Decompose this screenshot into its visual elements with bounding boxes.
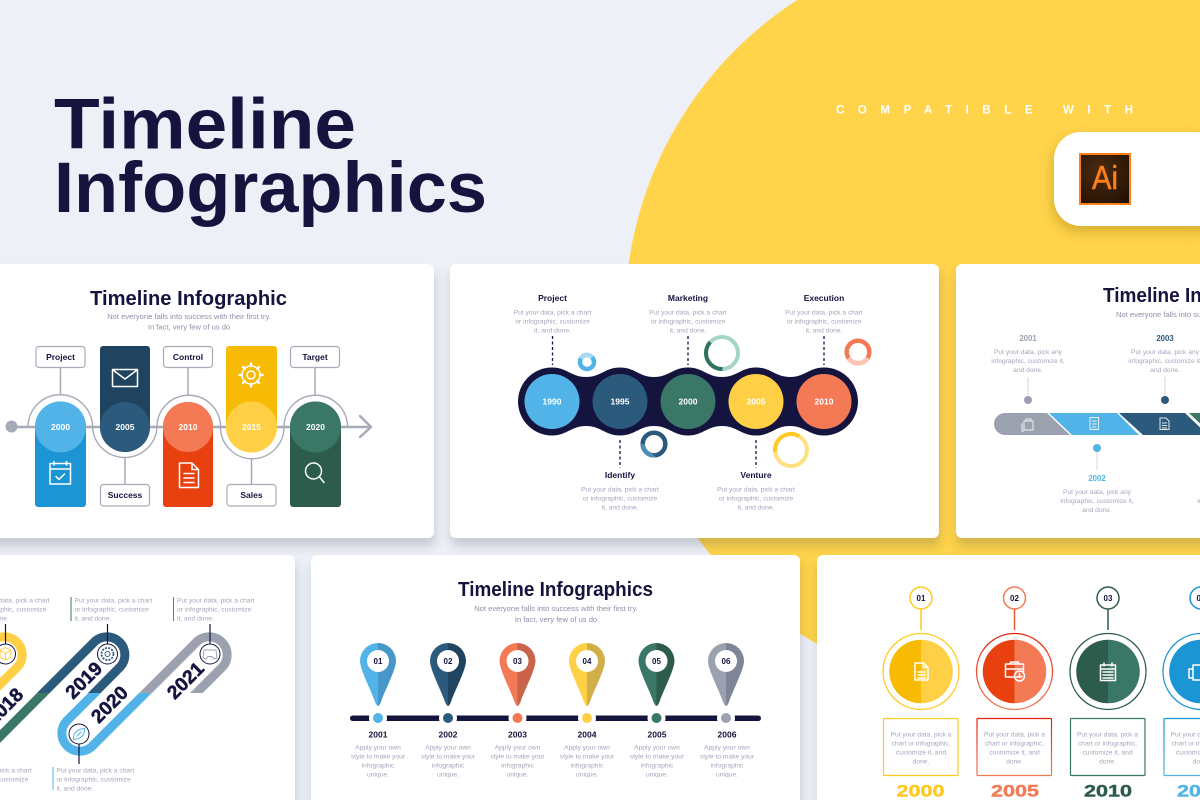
icon: briefcase clock xyxy=(1006,662,1024,681)
pin 05: 2005 xyxy=(648,730,667,740)
milestone descriptions: Put your data, pick a chart xyxy=(785,310,863,316)
pin 06: Apply your own xyxy=(704,744,750,752)
column 2005: done. xyxy=(1006,758,1023,766)
pin 01: Apply your own xyxy=(355,744,401,752)
main title: Timeline xyxy=(54,86,356,164)
segmented bar xyxy=(994,413,1200,435)
milestone descriptions: or infographic, customize xyxy=(787,318,861,326)
milestone 2003 xyxy=(1128,334,1200,404)
panel title: Timeline Infographics xyxy=(458,578,653,601)
milestone descriptions: Put your data, pick a chart xyxy=(717,486,795,494)
navy bubble chain xyxy=(518,368,858,436)
column 2005: chart or infographic, xyxy=(985,740,1044,748)
panel: timeline with pills xyxy=(0,264,434,538)
milestone descriptions: Put your data, pick a chart xyxy=(514,310,591,316)
rotated years: 2021 xyxy=(163,658,209,704)
milestone descriptions: it, and done. xyxy=(738,504,775,512)
accent bars xyxy=(70,597,72,621)
milestone labels: Project xyxy=(538,293,567,303)
pin 03: infographic xyxy=(501,762,535,770)
panel: arrow bar timeline xyxy=(956,264,1200,538)
milestone labels: Marketing xyxy=(668,293,708,303)
milestone 2002: infographic, customize it, xyxy=(1060,498,1134,505)
pin 01: style to make your xyxy=(351,754,406,760)
column 2000 xyxy=(883,587,959,800)
capsule bands upper xyxy=(0,637,227,704)
panel subtitle: Not everyone falls into success with their first try. xyxy=(107,312,271,321)
milestone descriptions: it, and done. xyxy=(806,328,843,334)
milestone 2002 xyxy=(1060,444,1134,514)
pill: 2000 xyxy=(35,402,86,507)
milestone 2002: 2002 xyxy=(1088,474,1106,483)
main title: Infographics xyxy=(54,149,487,228)
year bubbles xyxy=(524,374,852,429)
panel subtitle: In fact, very few of us do xyxy=(148,322,230,332)
pin 06: infographic xyxy=(711,762,744,770)
rotated years: 2020 xyxy=(87,682,133,728)
column 2010: Put your data, pick a xyxy=(1077,732,1138,738)
icon: calendar xyxy=(1100,663,1116,680)
icon: gamepad node xyxy=(200,644,220,664)
rotated years: 2019 xyxy=(62,658,107,704)
pin 03: Apply your own xyxy=(495,744,541,752)
column 2000: done. xyxy=(913,758,930,766)
descriptions: or infographic, customize xyxy=(74,606,149,614)
pin 05: style to make your xyxy=(630,754,685,760)
milestone 2002: and done. xyxy=(1082,507,1112,514)
descriptions: or infographic, customize xyxy=(56,776,131,784)
column 2005: 02 xyxy=(1010,594,1019,603)
descriptions: or infographic, customize xyxy=(177,606,252,614)
milestone labels: Identify xyxy=(605,470,635,480)
pin 05 xyxy=(630,643,685,778)
main title xyxy=(54,86,487,228)
panel: diagonal capsule timeline xyxy=(0,555,295,800)
descriptions: it, and done. xyxy=(177,616,214,622)
pin 02: infographic xyxy=(432,762,465,770)
year bubbles: 2000 xyxy=(679,396,698,406)
pill: 2020 xyxy=(290,402,341,507)
icon: Ai logo: Ai xyxy=(1092,159,1118,196)
milestone 2002: Put your data, pick any xyxy=(1063,489,1132,496)
milestone descriptions: or infographic, customize xyxy=(515,318,590,326)
serpentine timeline line xyxy=(6,368,371,484)
pin 02: unique. xyxy=(437,772,459,778)
pin 03: unique. xyxy=(507,772,529,778)
column 2005: Put your data, pick a xyxy=(984,732,1045,738)
donut: yellow xyxy=(774,433,808,467)
pill: 2010 xyxy=(163,402,213,507)
column 2005: 2005 xyxy=(991,782,1039,800)
pin 01: 01 xyxy=(374,657,383,666)
column 2005: customize it, and xyxy=(989,750,1040,756)
pin 05: infographic xyxy=(641,762,674,770)
milestone 2001: Put your data, pick any xyxy=(994,349,1063,356)
label text: Sales xyxy=(240,490,263,500)
milestone 2003: 2003 xyxy=(1156,334,1174,343)
pin 04: 2004 xyxy=(578,730,597,740)
timeline bar xyxy=(350,716,761,721)
milestone 2003: infographic, customize it, xyxy=(1128,358,1200,365)
descriptions: it, and done. xyxy=(56,786,93,792)
column 2010: chart or infographic, xyxy=(1078,740,1137,748)
pin 04 xyxy=(560,643,615,778)
descriptions: it, and done. xyxy=(74,616,111,622)
pin 05: unique. xyxy=(646,772,668,778)
milestone descriptions: or infographic, customize xyxy=(651,318,725,326)
milestone descriptions: Put your data, pick a chart xyxy=(649,310,727,316)
column 2000: customize it, and xyxy=(896,750,946,756)
descriptions: Put your data, pick a chart xyxy=(74,598,152,604)
pill: 2005 xyxy=(100,346,150,452)
panel: bubble chain timeline xyxy=(450,264,939,538)
label text: Project xyxy=(46,352,75,362)
pin 03 xyxy=(490,643,545,778)
donut: green xyxy=(706,337,738,369)
pin 02: Apply your own xyxy=(425,744,471,752)
column 2010: customize it, and xyxy=(1082,750,1133,756)
pill: 2015: 2015 xyxy=(242,422,261,432)
milestone 2003: Put your data, pick any xyxy=(1131,349,1200,356)
column 2010: done. xyxy=(1099,758,1116,766)
pin 04: style to make your xyxy=(560,754,615,760)
label text xyxy=(46,352,328,500)
column 2010 xyxy=(1070,587,1146,800)
panel: circle column timeline xyxy=(817,555,1200,800)
pill: 2015 xyxy=(226,346,277,452)
panel: map pin timeline xyxy=(311,555,800,800)
accent bar 2021 xyxy=(172,597,174,621)
milestone descriptions xyxy=(514,310,863,512)
descriptions: Put your data, pick a chart xyxy=(177,598,255,604)
capsule bands lower xyxy=(0,693,152,756)
pin 04: infographic xyxy=(571,762,604,770)
pill: 2000: 2000 xyxy=(51,422,70,432)
pin 01 xyxy=(351,643,406,778)
year bubbles: 2005 xyxy=(747,396,766,406)
donut: orange xyxy=(842,336,874,368)
panel title: Timeline Infographic xyxy=(90,287,287,310)
pin 02: style to make your xyxy=(421,754,476,760)
milestone descriptions: Put your data, pick a chart xyxy=(581,486,659,494)
column 2010: 03 xyxy=(1104,594,1113,603)
pin 06: unique. xyxy=(716,772,738,778)
column 2000: Put your data, pick a xyxy=(891,732,952,738)
donut: blue xyxy=(577,352,597,372)
pin 06: 06 xyxy=(722,657,731,666)
pin 03: 03 xyxy=(513,657,522,666)
milestone 2001: 2001 xyxy=(1019,334,1037,343)
icon: cube node xyxy=(0,644,16,664)
pin 02: 2002 xyxy=(439,730,458,740)
pill: 2005: 2005 xyxy=(116,422,135,432)
connectors xyxy=(6,624,210,764)
icon: football node xyxy=(69,724,89,744)
milestone descriptions: it, and done. xyxy=(670,328,707,334)
label text: Success xyxy=(108,490,143,500)
label boxes xyxy=(36,346,340,506)
pin 01: 2001 xyxy=(369,730,388,740)
dashed connectors xyxy=(552,336,824,468)
pin 05: Apply your own xyxy=(634,744,680,752)
accent bar 2020 xyxy=(52,767,54,790)
column 2010: 2010 xyxy=(1084,782,1132,800)
column 2015 partial xyxy=(1163,587,1200,800)
bar icons xyxy=(1022,418,1169,431)
pin 03: style to make your xyxy=(490,754,545,760)
column 2000: 2000 xyxy=(896,782,944,800)
column 2000: chart or infographic, xyxy=(891,740,951,748)
milestone 2003: and done. xyxy=(1150,367,1180,374)
pin 01: infographic xyxy=(362,762,395,770)
milestone 2001: and done. xyxy=(1013,367,1043,374)
pin 06: style to make your xyxy=(700,754,755,760)
badge: Adobe Illustrator xyxy=(1054,132,1200,226)
descriptions: Put your data, pick a chart xyxy=(56,768,134,774)
rotated years xyxy=(0,658,209,730)
year bubbles: 1990 xyxy=(543,396,562,406)
pin 04: 04 xyxy=(583,657,592,666)
pill: 2010: 2010 xyxy=(179,422,198,432)
milestone 2001: infographic, customize it, xyxy=(991,358,1065,365)
pill: 2020: 2020 xyxy=(306,422,325,432)
pin 06 xyxy=(700,643,755,778)
milestone labels xyxy=(538,293,844,480)
icon: document xyxy=(915,663,928,680)
milestone descriptions: it, and done. xyxy=(602,504,639,512)
milestone descriptions: or infographic, customize xyxy=(583,496,657,502)
background yellow circle xyxy=(625,0,1200,692)
column 2000: 01 xyxy=(917,594,926,603)
pin 04: unique. xyxy=(576,772,598,778)
milestone descriptions: or infographic, customize xyxy=(719,496,793,502)
donut: dark blue xyxy=(643,433,665,455)
panel subtitle: In fact, very few of us do xyxy=(515,615,597,624)
year bubbles: 1995 xyxy=(611,396,630,406)
pin 02 xyxy=(421,643,476,778)
milestone 2001 xyxy=(991,334,1065,404)
milestone labels: Execution xyxy=(804,293,844,303)
panel subtitle: Not everyone falls into success with their first try. xyxy=(474,604,638,613)
pin 02: 02 xyxy=(444,657,453,666)
pin 06: 2006 xyxy=(718,730,737,740)
pin 05: 05 xyxy=(652,657,661,666)
label text: Target xyxy=(302,352,328,362)
year bubbles: 2010 xyxy=(815,396,834,406)
compatible with label: COMPATIBLE WITH xyxy=(836,104,1133,116)
icon: notes xyxy=(1189,665,1200,680)
pin 03: 2003 xyxy=(508,730,527,740)
pin 04: Apply your own xyxy=(564,744,610,752)
column 2005 xyxy=(976,587,1052,800)
label text: Control xyxy=(173,352,203,362)
icon: Ai logo xyxy=(1080,154,1130,204)
milestone labels: Venture xyxy=(740,470,772,480)
icon: gear node xyxy=(98,644,118,664)
milestone descriptions: it, and done. xyxy=(534,328,571,334)
descriptions xyxy=(0,598,255,792)
pin 01: unique. xyxy=(367,772,389,778)
